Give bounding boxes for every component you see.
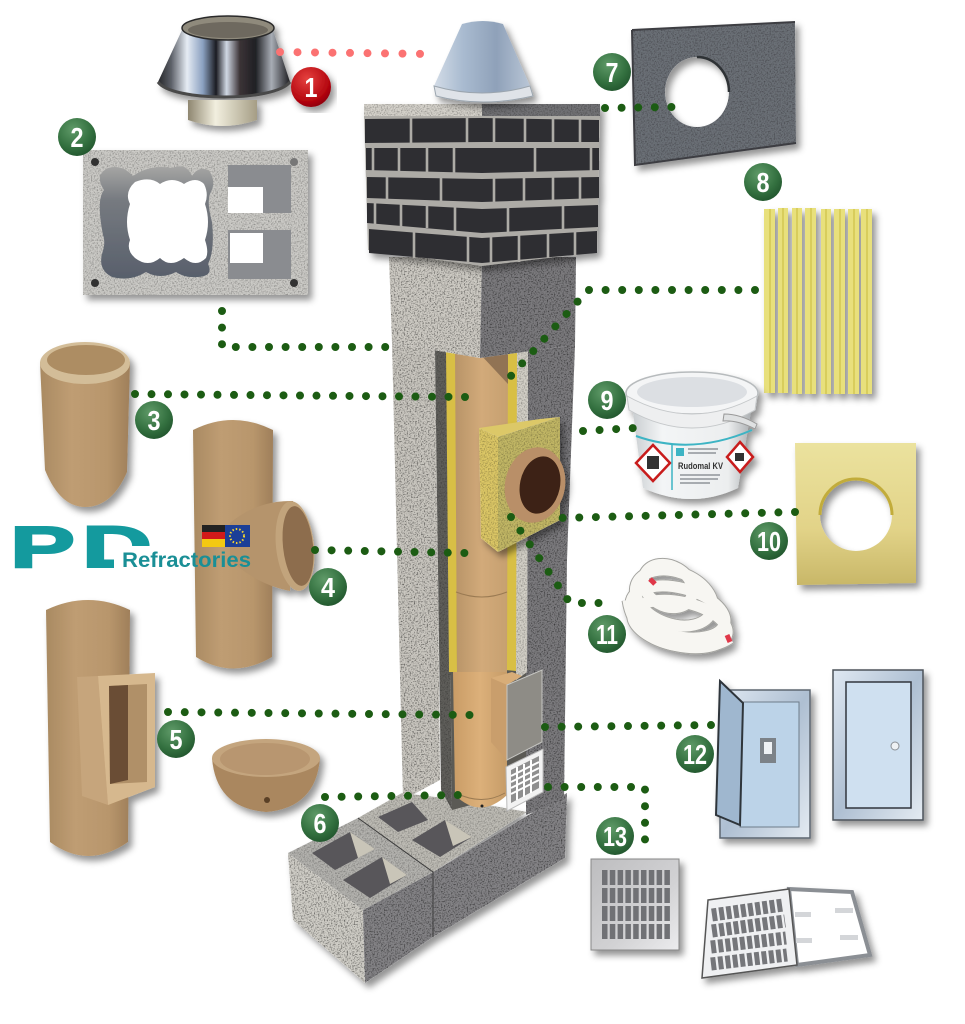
badge 4 — [309, 568, 347, 606]
badge 11 — [588, 615, 626, 653]
left wall — [392, 343, 440, 800]
logo: PD Refractories: Refractories — [122, 548, 251, 572]
part 5: flue pipe with inspection frame — [46, 600, 155, 856]
ventilation grille in chimney — [506, 749, 543, 811]
chimney top cap — [434, 21, 533, 102]
badge 3 — [135, 401, 173, 439]
inspection door in chimney — [491, 670, 542, 760]
badge 5: 5 — [170, 724, 182, 755]
badge 12 — [676, 735, 714, 773]
upper concrete block — [389, 257, 576, 358]
badge 10: 10 — [757, 526, 781, 557]
badge 5 — [157, 720, 195, 758]
badge 7: 7 — [606, 57, 618, 88]
part 11: rope seal — [626, 556, 732, 655]
badge 12: 12 — [683, 739, 707, 770]
badge 7 — [593, 53, 631, 91]
logo: PD Refractories — [10, 515, 251, 580]
part 2: concrete block with flue openings — [83, 150, 308, 295]
front-view grille — [591, 859, 679, 950]
part 7: fibre cement top plate — [632, 22, 796, 165]
insulated thimble plate — [479, 417, 572, 552]
open door — [716, 681, 810, 838]
part 9: bucket of mortar — [626, 372, 758, 499]
part 13: ventilation grilles — [591, 859, 870, 978]
central chimney cutaway — [288, 104, 600, 983]
flue pipe column — [453, 350, 508, 808]
inner wall shading — [435, 350, 452, 810]
badge 11: 11 — [596, 619, 618, 650]
logo: PD Refractories: D — [82, 515, 152, 580]
badge 9 — [588, 381, 626, 419]
number badges — [58, 53, 788, 855]
base concrete blocks — [288, 793, 567, 983]
badge 13: 13 — [603, 821, 627, 852]
part 1: chrome cowl — [158, 16, 290, 126]
badge 4: 4 — [321, 572, 335, 603]
part 12: open and closed inspection doors — [716, 670, 923, 838]
part 8: yellow insulation strips — [764, 208, 872, 394]
closed door — [833, 670, 923, 820]
part 6: ceramic condensate bowl — [212, 739, 320, 812]
open frame grille — [702, 889, 870, 978]
badge 8 — [744, 163, 782, 201]
part 4: T-piece flue pipe — [193, 420, 319, 668]
badge 9: 9 — [600, 385, 614, 416]
flag: Germany and EU — [202, 525, 250, 547]
green dotted connectors — [135, 107, 795, 840]
badge 10 — [750, 522, 788, 560]
badge 1: 1 — [304, 72, 318, 103]
badge 2: 2 — [70, 122, 84, 153]
badge 3: 3 — [148, 405, 160, 436]
badge 8: 8 — [756, 167, 770, 198]
interior backing — [435, 345, 528, 810]
right wall — [526, 345, 575, 815]
red dotted connector 1 — [280, 52, 430, 54]
badge 2 — [58, 118, 96, 156]
badge 13 — [596, 817, 634, 855]
part 10: insulation plate — [795, 443, 916, 585]
rope coil — [626, 556, 732, 655]
brick crown — [364, 104, 600, 266]
part 9: bucket of mortar: Rudomal KV — [678, 461, 723, 471]
yellow insulation strips — [446, 350, 517, 672]
badge 6: 6 — [314, 808, 326, 839]
logo: PD Refractories: P — [10, 515, 75, 580]
hazard diamonds and label — [636, 430, 752, 445]
part 3: ceramic flue pipe — [40, 342, 130, 507]
badge 6 — [301, 804, 339, 842]
badge 1 — [291, 67, 331, 107]
